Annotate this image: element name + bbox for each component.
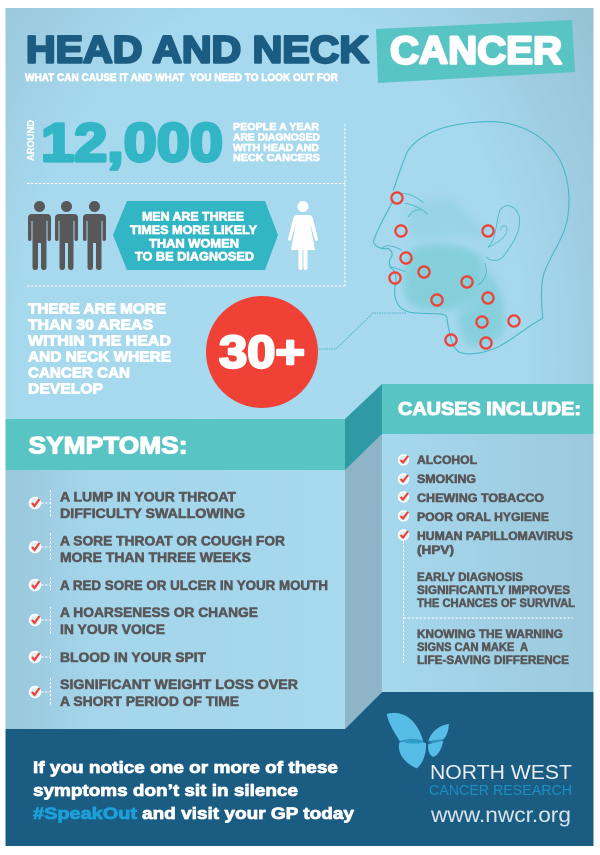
title: HEAD AND NECK: [26, 30, 370, 72]
statistic: 12,000: PEOPLE A YEAR: [233, 121, 319, 133]
text: more than 30 areas: THAN 30 AREAS: [28, 316, 153, 334]
call to action: symptoms don’t sit in silence: [33, 781, 298, 800]
call to action: and visit your GP today: [142, 804, 355, 823]
cause list: SMOKING: [417, 474, 476, 486]
text: more than 30 areas: DEVELOP: [28, 380, 103, 398]
text: more than 30 areas: WITHIN THE HEAD: [28, 332, 171, 350]
text: warning signs: SIGNS CAN MAKE A: [417, 642, 528, 654]
bottom dark band: [6, 692, 594, 846]
logo: organisation name: NORTH WEST: [430, 761, 572, 784]
statistic: 12,000: AROUND: [26, 120, 37, 161]
website: www.nwcr.org: [430, 804, 571, 827]
symptom list: DIFFICULTY SWALLOWING: [60, 506, 245, 521]
text: warning signs: KNOWING THE WARNING: [417, 629, 563, 641]
icons: three men: [28, 201, 106, 270]
logo: organisation name: [429, 761, 572, 799]
text: warning signs: LIFE-SAVING DIFFERENCE: [417, 655, 569, 667]
panel: symptoms: [6, 419, 345, 729]
head diagram: [373, 122, 569, 354]
statistic: 12,000: NECK CANCERS: [233, 152, 320, 164]
symptom list: A LUMP IN YOUR THROAT: [60, 490, 237, 504]
panel: causes: [382, 384, 594, 692]
symptom list: A SORE THROAT OR COUGH FOR: [60, 534, 285, 548]
hexagon callout: men three times more likely: MEN ARE THREE: [142, 212, 244, 224]
cause list: HUMAN PAPILLOMAVIRUS: [417, 531, 573, 543]
text: warning signs: [417, 629, 569, 667]
heading: causes include: [382, 384, 594, 434]
icon: woman: [288, 201, 318, 270]
hexagon callout: men three times more likely: TO BE DIAGNOSED: [135, 252, 254, 264]
symptom list: IN YOUR VOICE: [60, 622, 165, 637]
cause list: CHEWING TOBACCO: [417, 493, 544, 505]
symptom list: A RED SORE OR ULCER IN YOUR MOUTH: [60, 578, 328, 593]
symptom list: A SHORT PERIOD OF TIME: [60, 694, 239, 709]
cause check icons: [398, 455, 408, 540]
statistic: 12,000: 12,000: [41, 113, 223, 173]
text: early diagnosis: EARLY DIAGNOSIS: [417, 572, 523, 584]
text: more than 30 areas: CANCER CAN: [28, 364, 130, 382]
symptom list: SIGNIFICANT WEIGHT LOSS OVER: [60, 677, 298, 692]
heading: symptoms: [6, 419, 345, 470]
title: [26, 20, 575, 83]
hexagon callout: men three times more likely: TIMES MORE LIKELY: [130, 225, 257, 237]
3D fold between panels: [345, 384, 382, 729]
text: more than 30 areas: THERE ARE MORE: [28, 300, 166, 318]
symptom list: [60, 490, 328, 709]
text: more than 30 areas: AND NECK WHERE: [28, 348, 171, 366]
text: early diagnosis: THE CHANCES OF SURVIVAL: [417, 598, 575, 610]
text: more than 30 areas: [28, 300, 171, 398]
cause list: POOR ORAL HYGIENE: [417, 512, 549, 524]
text: early diagnosis: [417, 572, 575, 610]
call to action: If you notice one or more of these: [33, 758, 338, 777]
title: CANCER: [390, 30, 562, 72]
symptom list: MORE THAN THREE WEEKS: [60, 550, 251, 565]
logo: butterfly: [387, 713, 449, 768]
call to action: [33, 758, 355, 823]
subtitle: WHAT CAN CAUSE IT AND WHAT YOU NEED TO LOOK OUT FOR: [25, 72, 338, 84]
statistic: 12,000: WITH HEAD AND: [233, 142, 319, 154]
red circle: 30+: 30+: [219, 326, 305, 378]
heading: symptoms: SYMPTOMS:: [28, 432, 188, 460]
logo: organisation name: CANCER RESEARCH: [429, 782, 572, 799]
cause list: (HPV): [417, 545, 454, 557]
symptom check icons: [30, 498, 40, 698]
hexagon callout: men three times more likely: THAN WOMEN: [149, 238, 239, 250]
symptom list: BLOOD IN YOUR SPIT: [60, 650, 207, 665]
statistic: 12,000: [26, 113, 320, 173]
red circle: 30+: [206, 296, 318, 408]
markers: cancer areas: [389, 192, 520, 349]
heading: causes include: CAUSES INCLUDE:: [398, 399, 581, 419]
statistic: 12,000: ARE DIAGNOSED: [233, 132, 320, 144]
call to action: #SpeakOut: [33, 804, 137, 823]
connector line from 30+ to head: [309, 313, 407, 349]
cause list: [417, 455, 573, 557]
text: early diagnosis: SIGNIFICANTLY IMPROVES: [417, 585, 570, 597]
hexagon callout: men three times more likely: [113, 201, 278, 270]
symptom list: A HOARSENESS OR CHANGE: [60, 605, 258, 620]
cause list: ALCOHOL: [417, 455, 477, 467]
